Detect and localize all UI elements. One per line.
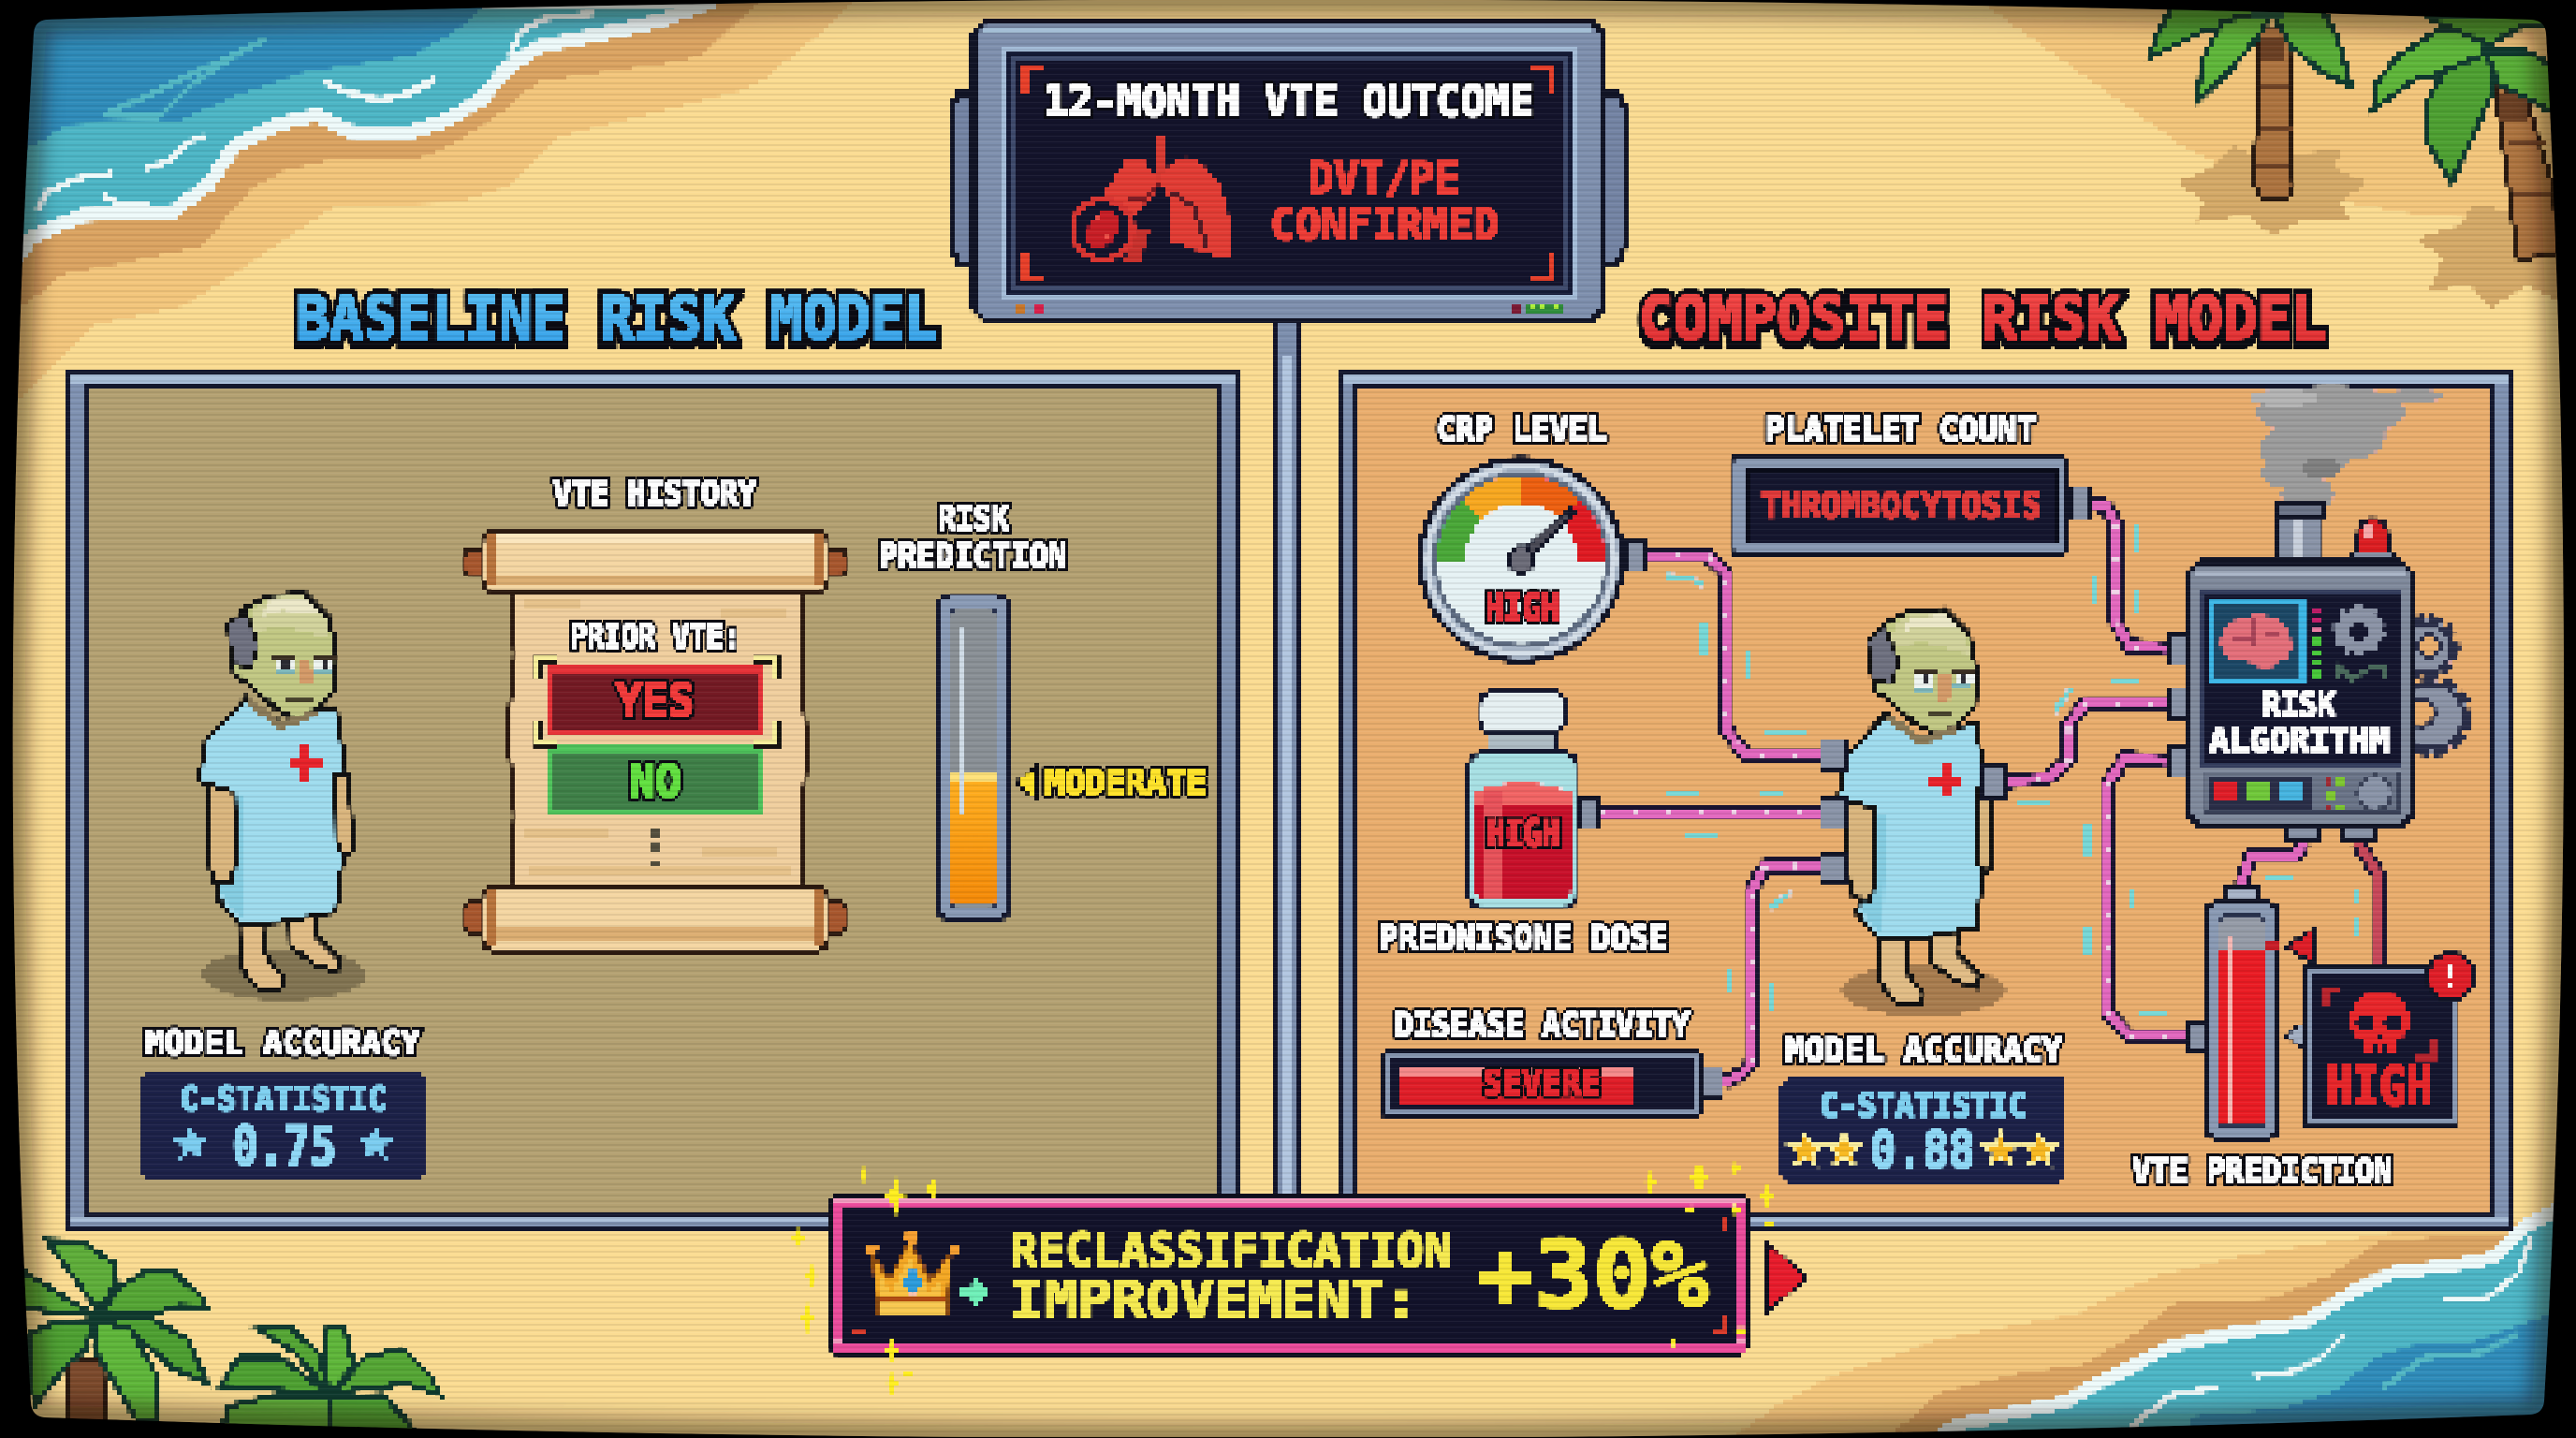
panel: composite risk model bbox=[1337, 370, 2511, 1232]
ocean bottom right bbox=[1928, 1203, 2576, 1438]
icon: risk algorithm machine bbox=[2168, 504, 2412, 840]
CRP level label: CRP LEVEL bbox=[1437, 411, 1606, 449]
ocean top left bbox=[0, 0, 715, 267]
control panel bbox=[2203, 772, 2398, 813]
severe: SEVERE bbox=[1483, 1064, 1601, 1103]
palm tree bottom centre-left bbox=[218, 1328, 440, 1438]
icon: disease activity bar bbox=[1383, 1050, 1722, 1118]
0.75 value: 0.75 bbox=[232, 1114, 336, 1178]
algorithm word: ALGORITHM bbox=[2209, 722, 2390, 760]
platelet count label: PLATELET COUNT bbox=[1765, 411, 2036, 449]
YES: YES bbox=[616, 675, 695, 727]
moderate: MODERATE bbox=[1045, 764, 1207, 802]
reclassification: RECLASSIFICATION bbox=[1010, 1224, 1452, 1278]
accuracy stars bbox=[173, 1125, 393, 1159]
icon: VTE prediction tube bbox=[2188, 888, 2280, 1138]
palm shadows bbox=[2176, 145, 2368, 236]
VTE prediction label: VTE PREDICTION bbox=[2132, 1152, 2393, 1191]
model accuracy label: MODEL ACCURACY bbox=[145, 1024, 420, 1063]
baseline art layer bbox=[65, 370, 1239, 1232]
arrow: mint bbox=[961, 1275, 990, 1309]
palm tree far right bbox=[2373, 14, 2560, 260]
bottom right sand bands bbox=[1732, 1217, 2576, 1438]
more rows dots bbox=[652, 830, 658, 867]
bottle HIGH: HIGH bbox=[1486, 813, 1560, 856]
panel: baseline risk model bbox=[65, 370, 1239, 1232]
palm tree top centre-right bbox=[2149, 7, 2351, 198]
monitor text bbox=[1044, 76, 1534, 250]
banner corner brackets bbox=[852, 1217, 1726, 1332]
C-statistic: C-STATISTIC bbox=[180, 1080, 387, 1119]
+30%: +30% bbox=[1476, 1220, 1709, 1329]
outcome monitor bbox=[951, 22, 1625, 320]
heading: baseline risk model: BASELINE RISK MODEL bbox=[296, 285, 938, 354]
composite C-statistic: C-STATISTIC bbox=[1820, 1087, 2027, 1125]
prediction: PREDICTION bbox=[879, 537, 1067, 576]
top left sand bands bbox=[0, 0, 855, 412]
icon: crown bbox=[867, 1231, 961, 1313]
connection tubes bbox=[1599, 504, 2378, 1083]
callout: reclassification banner bbox=[793, 1155, 1806, 1395]
risk prediction tube bbox=[937, 594, 1010, 920]
composite labels bbox=[1379, 411, 2433, 1191]
bezel LEDs bbox=[1014, 302, 1561, 313]
icon: brain bbox=[2210, 602, 2303, 680]
NO option bbox=[549, 749, 762, 813]
heading: composite risk model: COMPOSITE RISK MODEL bbox=[1639, 285, 2326, 354]
icon: gears bbox=[2396, 620, 2467, 752]
smoke bbox=[2250, 386, 2443, 513]
selection brackets bbox=[536, 658, 776, 743]
monitor title: 12-MONTH VTE OUTCOME bbox=[1044, 76, 1534, 126]
baseline labels bbox=[145, 475, 1207, 1178]
icon: lungs with clot bbox=[1073, 135, 1230, 262]
sparkles bbox=[793, 1155, 1776, 1395]
data flow arrows bbox=[1665, 525, 2358, 1015]
monitor casing bbox=[951, 22, 1625, 320]
risk: RISK bbox=[938, 500, 1009, 538]
DVT/PE: DVT/PE bbox=[1309, 153, 1460, 203]
small display gear bbox=[2343, 615, 2375, 647]
screen corner brackets bbox=[1025, 69, 1552, 277]
NO: NO bbox=[629, 756, 681, 808]
composite model accuracy label: MODEL ACCURACY bbox=[1785, 1032, 2062, 1070]
risk word: RISK bbox=[2262, 686, 2335, 725]
palm tree bottom left bbox=[19, 1240, 208, 1438]
0.88 value: 0.88 bbox=[1870, 1121, 1975, 1180]
arrow: red right bbox=[1767, 1242, 1806, 1313]
icon: patient composite bbox=[1838, 609, 2006, 1017]
banner art bbox=[793, 1155, 1806, 1395]
marker arrow bbox=[2286, 929, 2314, 964]
improvement: IMPROVEMENT: bbox=[1010, 1270, 1418, 1329]
composite accuracy stars bbox=[1788, 1132, 2057, 1166]
gauge HIGH: HIGH bbox=[1486, 587, 1559, 630]
icon: high risk alert box bbox=[2284, 953, 2474, 1126]
alert HIGH: HIGH bbox=[2326, 1054, 2433, 1118]
banner text bbox=[1010, 1220, 1709, 1329]
disease activity label: DISEASE ACTIVITY bbox=[1395, 1006, 1690, 1045]
icon: CRP gauge bbox=[1420, 459, 1644, 661]
central connector pole bbox=[1274, 318, 1303, 1208]
accuracy box bbox=[139, 1070, 426, 1181]
icon: skull bbox=[2350, 992, 2409, 1052]
composite art layer bbox=[1337, 370, 2511, 1232]
icon: prednisone bottle bbox=[1469, 691, 1599, 908]
thrombocytosis: THROMBOCYTOSIS bbox=[1761, 485, 2042, 526]
moderate pointer bbox=[1016, 766, 1036, 800]
icon: VTE history scroll bbox=[463, 530, 847, 951]
composite accuracy box bbox=[1780, 1076, 2065, 1186]
confirmed: CONFIRMED bbox=[1270, 199, 1499, 250]
top right dark sand bbox=[1989, 6, 2554, 220]
VTE history label: VTE HISTORY bbox=[553, 475, 756, 513]
icon: patient baseline bbox=[198, 593, 366, 1001]
level LEDs bbox=[2314, 607, 2321, 677]
prednisone label: PREDNISONE DOSE bbox=[1379, 919, 1668, 958]
YES option bbox=[549, 669, 762, 733]
icon: platelet display bbox=[1732, 457, 2090, 554]
patient connectors bbox=[1821, 740, 2006, 883]
prior VTE label: PRIOR VTE: bbox=[570, 618, 740, 656]
